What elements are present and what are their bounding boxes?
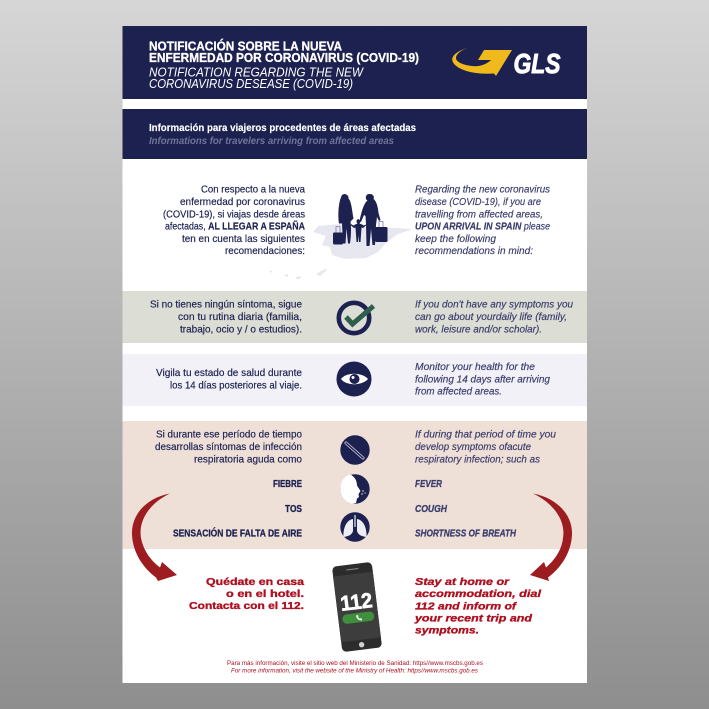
icon: eye xyxy=(336,362,372,396)
text: symptoms english xyxy=(415,429,556,465)
icon: phone 112: 112 xyxy=(339,589,374,616)
text: monitor english xyxy=(415,361,550,398)
text: no symptoms spanish: con tu rutina diaria (familia, xyxy=(178,311,302,323)
text: symptoms english: respiratory infection; such as xyxy=(415,453,541,465)
text: stay home spanish xyxy=(189,576,304,612)
text: intro english: recommendations in mind: xyxy=(415,245,533,257)
text: intro spanish: recomendaciones: xyxy=(225,245,305,257)
text: symptoms english: If during that period of time you xyxy=(415,429,556,441)
text: stay home english: accommodation, dial xyxy=(415,588,542,600)
panel: header xyxy=(122,26,587,99)
text: monitor spanish xyxy=(156,367,302,392)
poster sheet xyxy=(122,26,587,683)
text: monitor english: following 14 days after arriving xyxy=(415,374,550,386)
label: tos: TOS xyxy=(285,503,302,515)
text: stay home spanish: Contacta con el 112. xyxy=(189,600,304,612)
text: symptoms english: develop symptoms ofacute xyxy=(415,441,531,453)
text: no symptoms english: can go about yourdaily life (family, xyxy=(415,311,567,323)
text: intro english: UPON ARRIVAL IN SPAIN please xyxy=(415,221,550,233)
arrow: left xyxy=(132,494,177,581)
icon: coughing face xyxy=(340,474,370,504)
panel: symptoms xyxy=(122,421,587,549)
text: symptoms spanish: Si durante ese período de tiempo xyxy=(156,429,302,441)
footer note: For more information, visit the website of the Ministry of Health: https//www.mscbs.gob.es xyxy=(231,668,479,675)
panel: monitor health xyxy=(122,354,587,406)
title: NOTIFICACIÓN SOBRE LA NUEVA xyxy=(149,39,343,54)
text: intro spanish: afectadas, AL LLEGAR A ESPAÑA xyxy=(165,220,305,233)
subheading: Información para viajeros procedentes de áreas afectadas xyxy=(149,122,416,134)
text: intro spanish: enfermedad por coronavirus xyxy=(180,196,305,208)
text: stay home spanish: o en el hotel. xyxy=(226,588,304,600)
text: intro spanish xyxy=(163,184,305,257)
text: stay home english: your recent trip and xyxy=(414,613,533,625)
text: no symptoms spanish: Si no tienes ningún síntoma, sigue xyxy=(150,299,302,311)
icon: phone 112 xyxy=(332,562,382,652)
footer note xyxy=(227,660,484,675)
text: symptoms spanish: desarrollas síntomas de infección xyxy=(155,441,302,453)
label: shortness of breath: SHORTNESS OF BREATH xyxy=(415,528,516,540)
text: stay home spanish: Quédate en casa xyxy=(206,576,304,588)
panel: no symptoms xyxy=(122,291,587,343)
icon: GLS logo: GLS xyxy=(514,48,561,79)
label: fiebre: FIEBRE xyxy=(273,478,302,490)
icon: check mark xyxy=(339,303,374,333)
icon: thermometer xyxy=(340,435,370,465)
text: intro spanish: ten en cuenta las siguientes xyxy=(182,233,305,245)
text: no symptoms english: work, leisure and/or scholar). xyxy=(415,323,542,335)
panel: subheader xyxy=(122,109,587,159)
text: no symptoms spanish: trabajo, ocio y / o estudios). xyxy=(180,323,302,335)
text: monitor spanish: los 14 días posteriores al viaje. xyxy=(170,380,302,392)
text: monitor english: from affected areas. xyxy=(415,386,502,398)
icon: lungs xyxy=(340,512,370,542)
text: monitor spanish: Vigila tu estado de salud durante xyxy=(156,367,302,379)
panel: intro xyxy=(163,184,551,279)
icon: GLS logo xyxy=(452,48,561,79)
title: ENFERMEDAD POR CORONAVIRUS (COVID-19) xyxy=(149,50,419,65)
text: intro english: travelling from affected areas, xyxy=(415,208,543,220)
title: NOTIFICATION REGARDING THE NEW xyxy=(149,65,365,80)
text: intro english: Regarding the new coronavirus xyxy=(415,184,551,196)
icon: travelling family xyxy=(333,194,388,246)
text: no symptoms spanish xyxy=(150,299,302,335)
text: symptoms spanish xyxy=(155,429,302,465)
text: stay home english: 112 and inform of xyxy=(415,600,518,612)
text: monitor english: Monitor your health for the xyxy=(415,361,535,373)
text: intro spanish: (COVID-19), si viajas desde áreas xyxy=(163,208,305,220)
label: cough: COUGH xyxy=(415,503,447,515)
arrow: right xyxy=(530,494,572,581)
text: intro english: disease (COVID-19), if you are xyxy=(415,196,541,208)
footer note: Para más información, visite el sitio web del Ministerio de Sanidad: https//www.mscbs.gob.es xyxy=(227,660,484,667)
text: no symptoms english xyxy=(415,299,573,335)
text: intro english: keep the following xyxy=(415,233,496,245)
label: sensación de falta de aire: SENSACIÓN DE FALTA DE AIRE xyxy=(173,527,302,540)
text: symptoms spanish: respiratoria aguda como xyxy=(194,453,302,465)
text: intro spanish: Con respecto a la nueva xyxy=(201,184,305,196)
icon: map of Spain xyxy=(269,224,413,279)
label: fever: FEVER xyxy=(415,478,442,490)
text: stay home english xyxy=(414,576,542,636)
subheading english: Informations for travelers arriving from affected areas xyxy=(149,135,394,147)
title: CORONAVIRUS DESEASE (COVID-19) xyxy=(149,76,353,91)
title xyxy=(149,39,419,91)
text: stay home english: symptoms. xyxy=(415,624,479,636)
text: no symptoms english: If you don't have any symptoms you xyxy=(415,299,573,311)
text: intro english xyxy=(415,184,551,257)
text: stay home english: Stay at home or xyxy=(415,576,510,588)
